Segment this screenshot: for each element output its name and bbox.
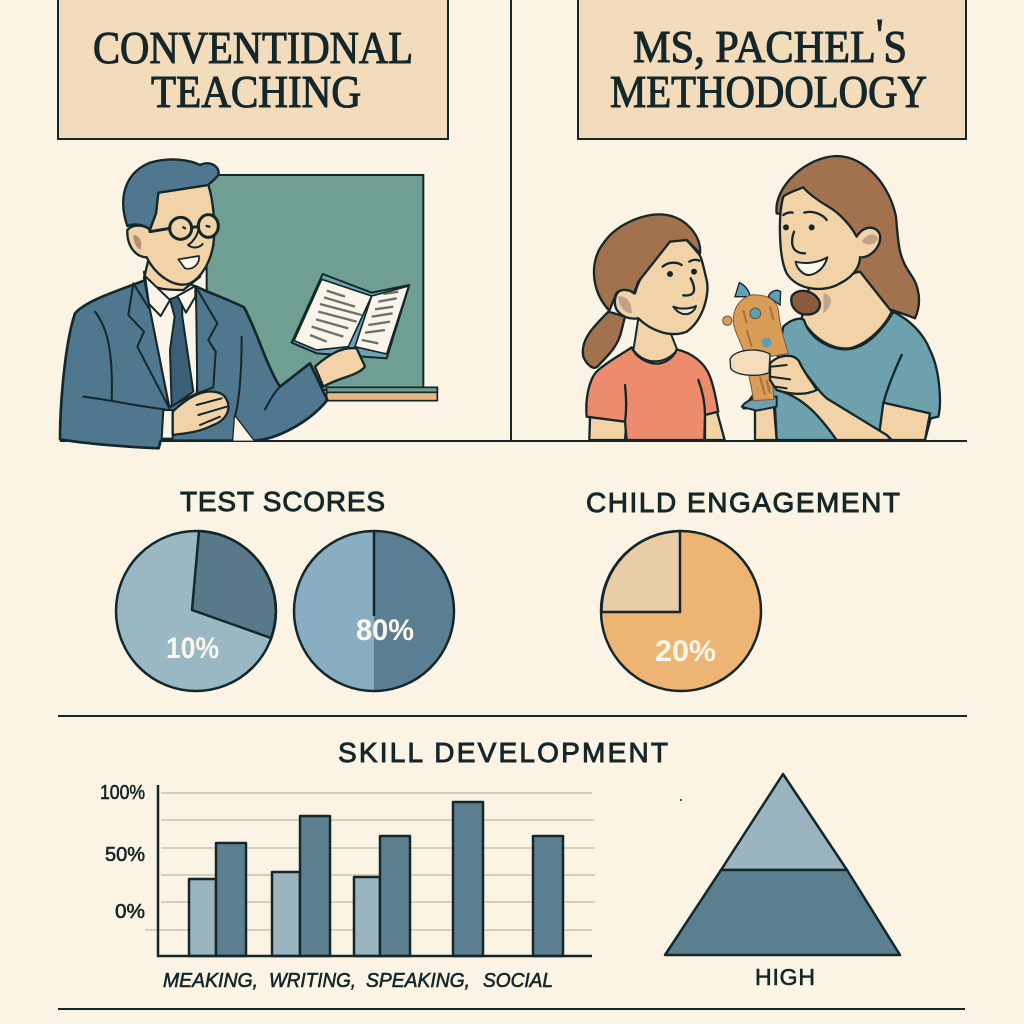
puppet xyxy=(723,283,817,401)
illustration: teacher and child with puppet xyxy=(583,156,940,440)
pyramid chart xyxy=(665,774,900,955)
pie chart: methodology test scores 80%: 80% xyxy=(356,614,414,647)
open book xyxy=(292,274,409,358)
teacher's hand xyxy=(315,348,365,387)
x axis labels: SPEAKING, xyxy=(366,970,470,992)
teacher xyxy=(60,159,327,448)
pie chart: conventional test scores 10% xyxy=(116,531,276,691)
pie chart: child engagement 20% xyxy=(601,531,761,691)
y axis labels: 50% xyxy=(105,844,145,866)
panel: Ms. Pachel's methodology heading: MS, PACHEL xyxy=(633,21,897,72)
panel: conventional teaching heading xyxy=(58,0,448,139)
pie chart: conventional test scores 10%: 10% xyxy=(166,632,219,665)
heading: child engagement: CHILD ENGAGEMENT xyxy=(586,487,900,518)
bar chart: skill development xyxy=(100,782,595,992)
panel: conventional teaching heading: TEACHING xyxy=(151,66,361,117)
x axis labels: MEAKING, xyxy=(163,970,258,992)
panel: Ms. Pachel's methodology heading: METHODOLOGY xyxy=(610,66,927,117)
teacher with puppet xyxy=(742,156,940,440)
heading: skill development: SKILL DEVELOPMENT xyxy=(338,737,668,768)
y axis labels xyxy=(100,782,145,923)
illustration: teacher at chalkboard xyxy=(60,159,437,448)
y axis labels: 100% xyxy=(100,782,145,804)
heading: test scores: TEST SCORES xyxy=(180,486,385,517)
panel: Ms. Pachel's methodology heading xyxy=(578,0,966,139)
panel: conventional teaching heading: CONVENTIDNAL xyxy=(93,22,413,73)
panel: Ms. Pachel's methodology heading: ' xyxy=(876,9,883,60)
pie chart: child engagement 20%: 20% xyxy=(655,635,716,668)
x axis labels xyxy=(163,970,553,992)
chalkboard xyxy=(207,175,437,401)
pyramid label: high: HIGH xyxy=(755,964,815,990)
child xyxy=(583,214,725,440)
y axis labels: 0% xyxy=(115,901,145,923)
panel: Ms. Pachel's methodology heading: S xyxy=(883,21,907,72)
x axis labels: SOCIAL xyxy=(483,970,553,992)
x axis labels: WRITING, xyxy=(269,970,356,992)
pie chart: methodology test scores 80% xyxy=(294,531,454,691)
